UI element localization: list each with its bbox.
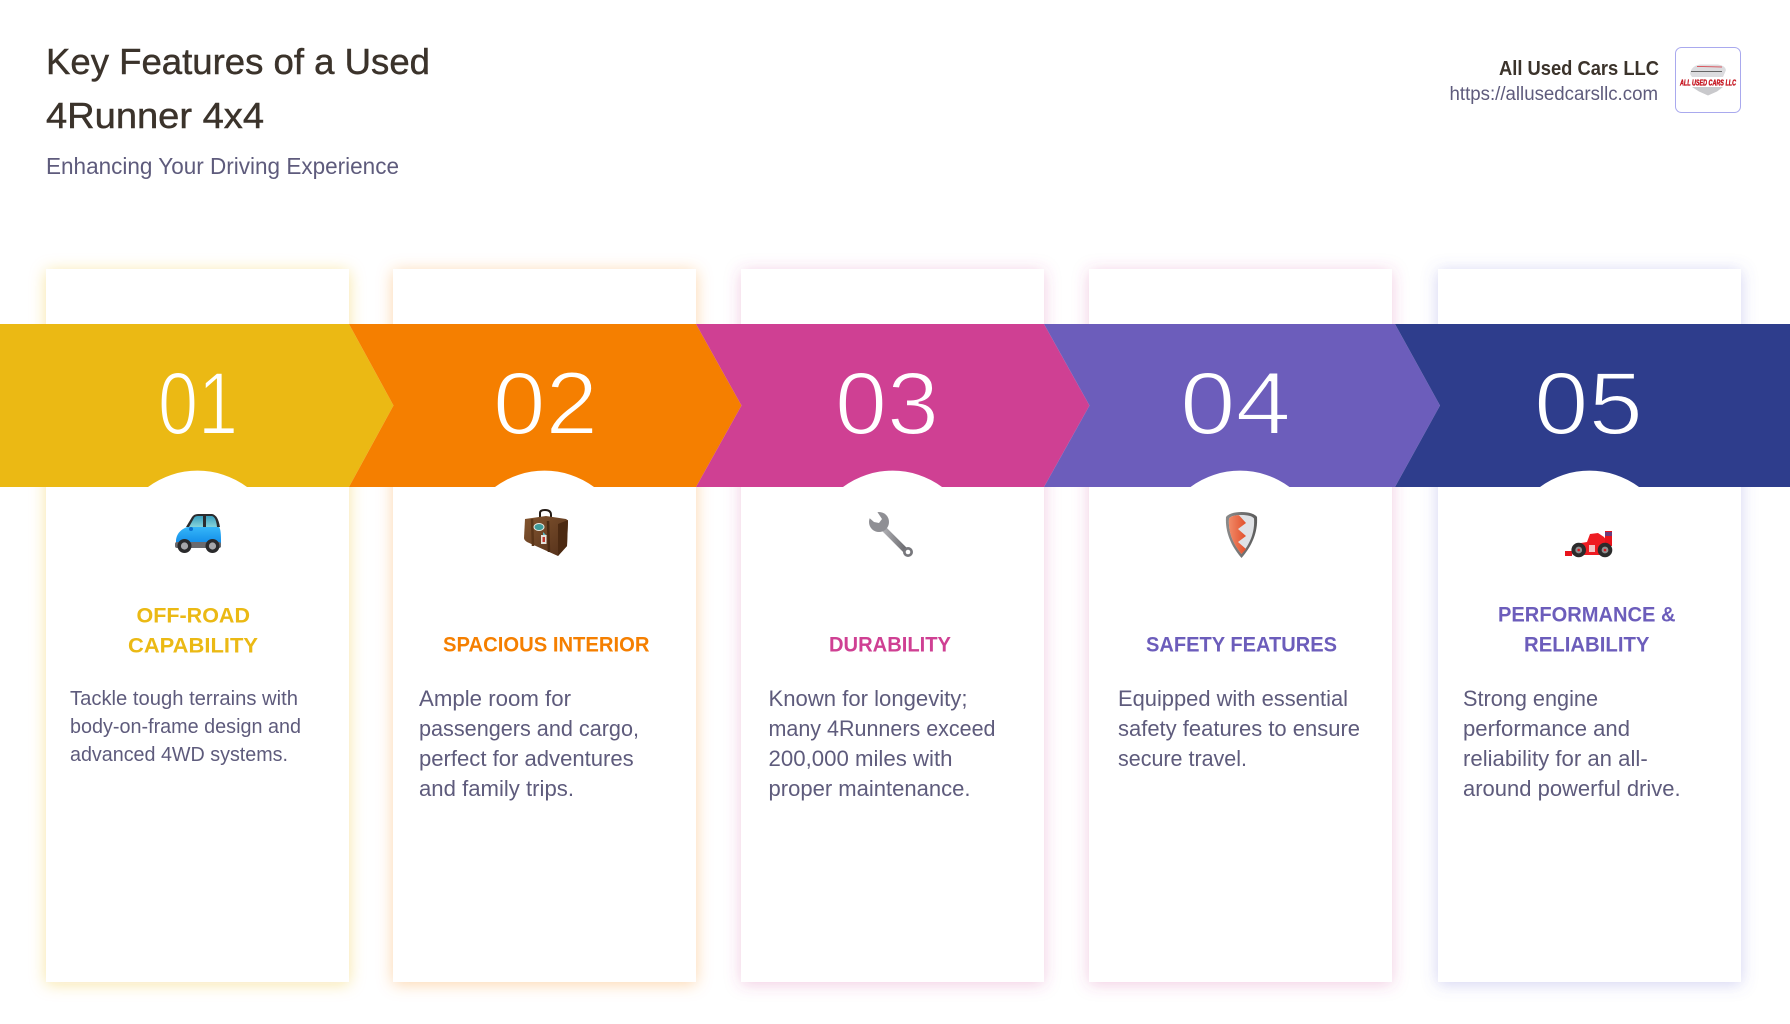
body text: passengers and cargo,: [419, 716, 639, 741]
body text: Equipped with essential: [1118, 686, 1348, 711]
arrow 02: [349, 324, 742, 487]
body text: [419, 686, 639, 801]
heading: OFF-ROAD: [136, 604, 250, 628]
body text: proper maintenance.: [768, 776, 970, 801]
heading: PERFORMANCE &: [1498, 604, 1676, 626]
company name and url: [1450, 57, 1659, 105]
body text: Tackle tough terrains with: [70, 688, 298, 710]
body text: Strong engine: [1463, 686, 1598, 711]
company name and url: All Used Cars LLC: [1499, 57, 1659, 80]
heading: SPACIOUS INTERIOR: [443, 634, 650, 656]
card 1 panel: [46, 269, 349, 982]
arrow 01: 01: [158, 353, 238, 453]
body text: Known for longevity;: [768, 686, 968, 711]
body text: 200,000 miles with: [768, 746, 952, 771]
icon: shield: [1226, 512, 1257, 558]
feature cards: [46, 269, 1741, 982]
arrow 03: [696, 324, 1090, 487]
heading: [1498, 604, 1676, 656]
body text: [1463, 686, 1681, 801]
card 2 panel: [393, 269, 696, 982]
body text: perfect for adventures: [419, 746, 634, 771]
numbered arrow ribbon: [0, 324, 1790, 487]
body text: Ample room for: [419, 686, 571, 711]
arrow 02: 02: [493, 353, 598, 453]
body text: [70, 688, 301, 766]
body text: body-on-frame design and: [70, 716, 301, 738]
column 5: performance and reliability: [1463, 471, 1681, 801]
icon: race car: [1565, 531, 1612, 557]
body text: reliability for an all-: [1463, 746, 1648, 771]
heading: [128, 604, 258, 658]
arrow 04: [1044, 324, 1440, 487]
arrow 05: 05: [1534, 353, 1643, 453]
heading: CAPABILITY: [128, 634, 258, 658]
icon: wrench: [866, 507, 913, 557]
body text: [768, 686, 996, 801]
arrow 03: 03: [835, 353, 939, 453]
card 3 panel: [741, 269, 1044, 982]
body text: safety features to ensure: [1118, 716, 1360, 741]
icon: suitcase: [524, 510, 568, 556]
title: Key Features of a Used: [46, 41, 430, 82]
subtitle: Enhancing Your Driving Experience: [46, 153, 399, 179]
arrow 05: [1395, 324, 1790, 487]
body text: advanced 4WD systems.: [70, 744, 288, 766]
column 3: durability: [768, 471, 996, 801]
icon: blue car: [175, 514, 221, 553]
arrow 01: [0, 324, 394, 487]
heading: SAFETY FEATURES: [1146, 634, 1337, 656]
company name and url: https://allusedcarsllc.com: [1450, 84, 1658, 105]
column 1: off-road capability: [70, 471, 301, 766]
body text: many 4Runners exceed: [768, 716, 996, 741]
body text: [1118, 686, 1360, 771]
title: 4Runner 4x4: [46, 95, 264, 136]
arrow 04: 04: [1180, 353, 1291, 453]
body text: and family trips.: [419, 776, 574, 801]
body text: secure travel.: [1118, 746, 1247, 771]
heading: RELIABILITY: [1524, 634, 1650, 656]
card 4 panel: [1089, 269, 1392, 982]
company logo: [1676, 48, 1740, 112]
company logo: ALL USED CARS LLC: [1679, 78, 1736, 88]
body text: performance and: [1463, 716, 1630, 741]
card 5 panel: [1438, 269, 1741, 982]
body text: around powerful drive.: [1463, 776, 1681, 801]
title: [46, 41, 430, 136]
column 4: safety features: [1118, 471, 1360, 771]
heading: DURABILITY: [829, 634, 951, 656]
column 2: spacious interior: [419, 471, 650, 801]
